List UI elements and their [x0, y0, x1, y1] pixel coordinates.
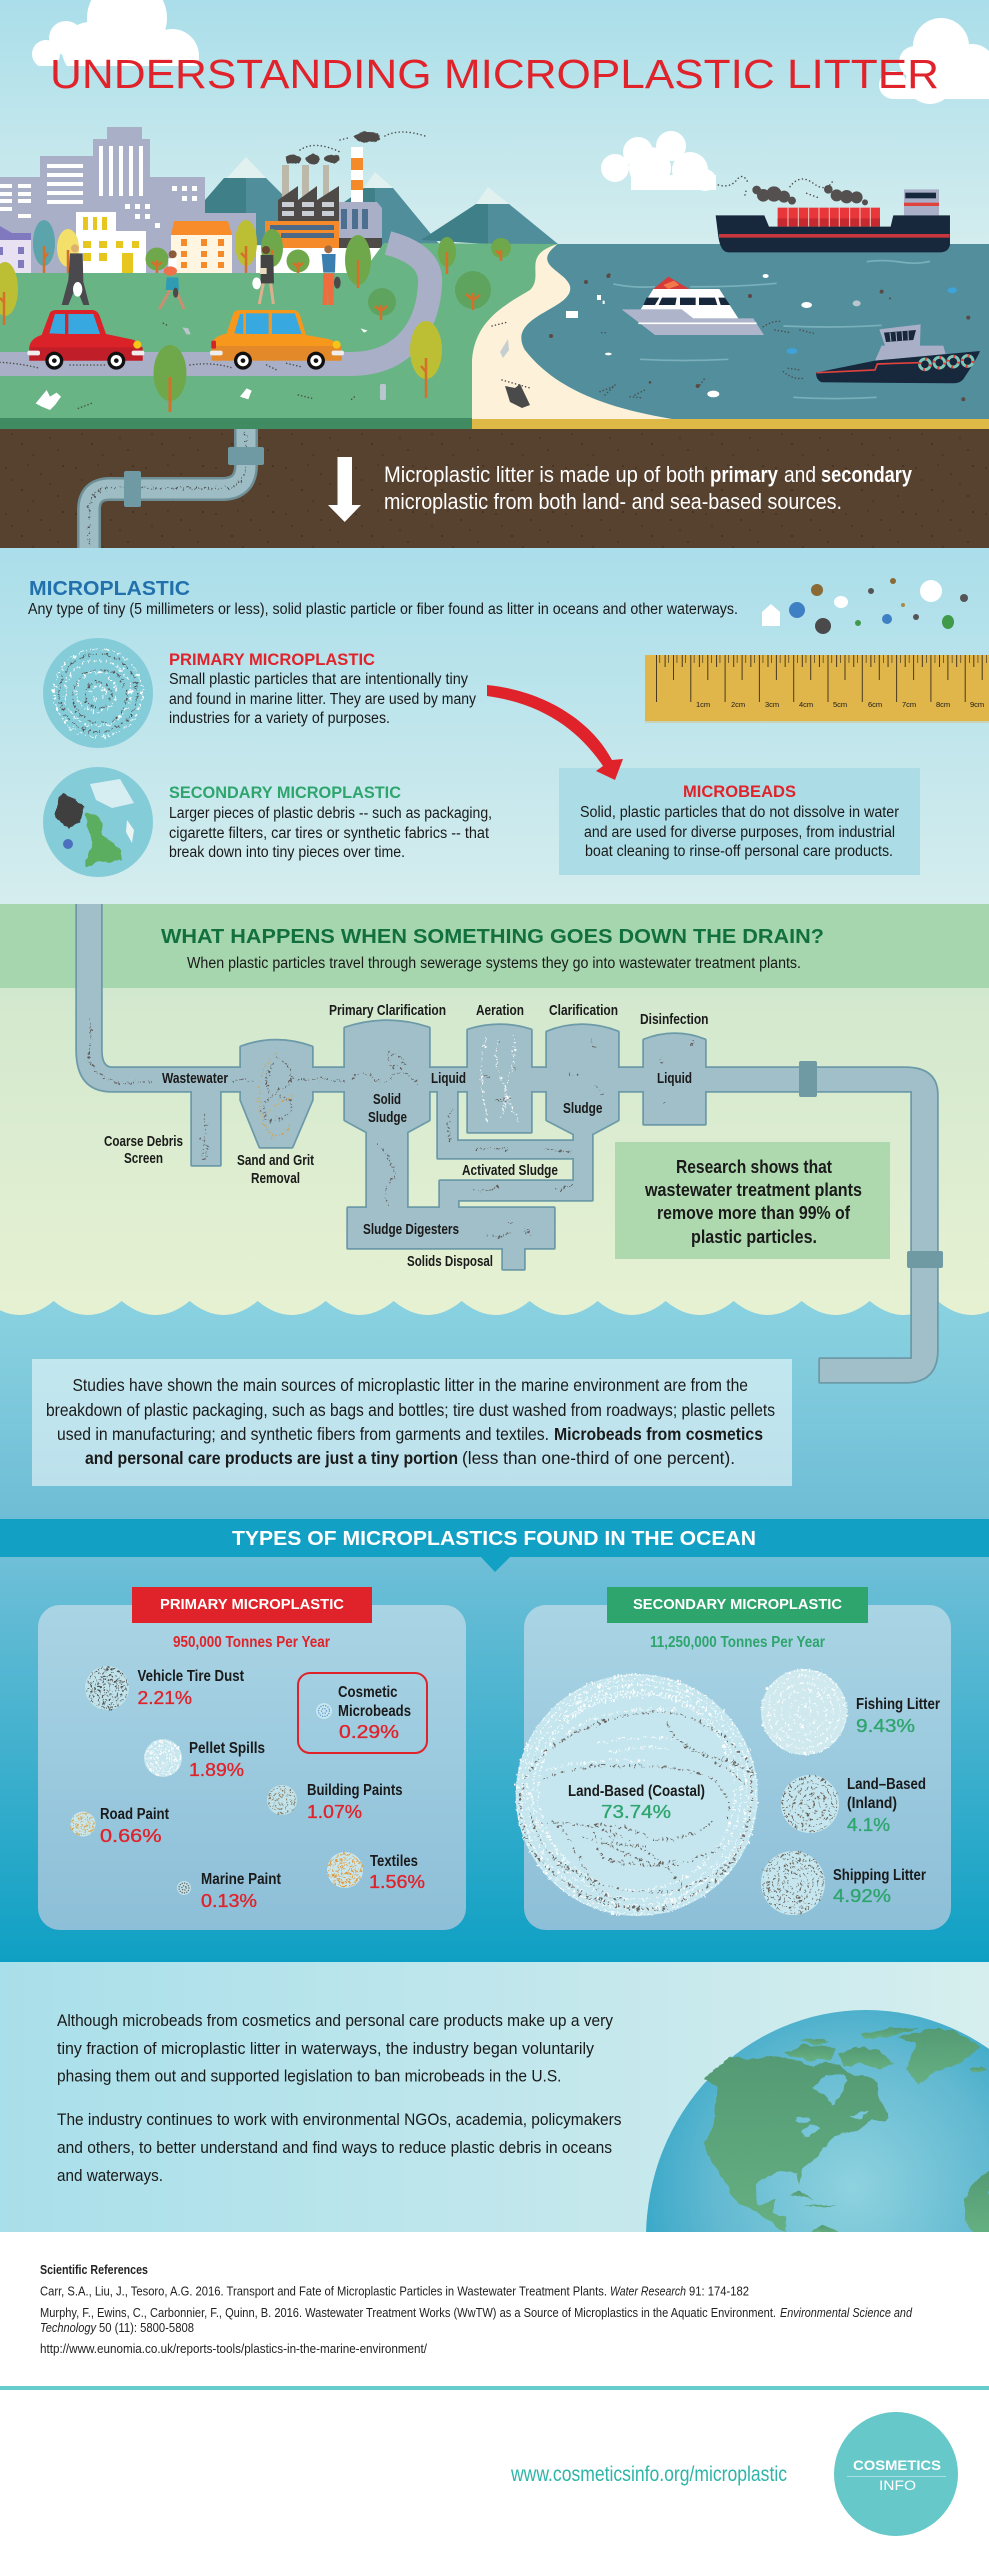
land-based inland: Land–Based: [847, 1776, 926, 1793]
road paint: Road Paint: [100, 1806, 170, 1823]
building paints: 1.07%: [307, 1802, 362, 1822]
scientific references: Scientific References: [40, 2263, 148, 2277]
diagram labels: Liquid: [431, 1070, 466, 1087]
cloud: top right: [879, 18, 989, 104]
cosmetic microbeads callout: Microbeads: [338, 1703, 411, 1720]
diagram labels: [104, 1002, 708, 1270]
scientific references: Murphy, F., Ewins, C., Carbonnier, F., Quinn, B. 2016. Wastewater Treatment Works (WwTW) as a Source of Microplastics in the Aquatic Environment.: [40, 2306, 776, 2320]
panel: microbeads: and are used for diverse purposes, from industrial: [584, 824, 895, 841]
primary microplastic text: PRIMARY MICROPLASTIC: [169, 650, 375, 669]
diagram labels: Clarification: [549, 1002, 618, 1019]
cloud: above the ship: [601, 131, 716, 191]
factory: [265, 147, 382, 248]
diagram labels: Sludge Digesters: [363, 1221, 459, 1238]
pipe couplings: [799, 1061, 943, 1268]
panel: microbeads: Solid, plastic particles that do not dissolve in water: [580, 804, 899, 821]
panel: studies: Microbeads from cosmetics: [554, 1424, 763, 1444]
ruler: 5cm: [833, 700, 847, 709]
grass: [0, 243, 562, 419]
title: UNDERSTANDING MICROPLASTIC LITTER: [50, 51, 939, 97]
heading: microplastic: MICROPLASTIC: [29, 578, 190, 600]
arrow down: [328, 457, 361, 522]
shipping litter: 4.92%: [833, 1886, 891, 1906]
road paint: [70, 1806, 170, 1846]
panel: primary microplastic: [38, 1587, 466, 1930]
secondary microplastic text: Larger pieces of plastic debris -- such as packaging,: [169, 805, 492, 822]
green heading band: When plastic particles travel through sewerage systems they go into wastewater treatment plants.: [187, 955, 801, 972]
intro text: secondary: [821, 462, 913, 487]
panel: microplastic definition background: [0, 548, 989, 904]
intro text: Microplastic litter is made up of both: [384, 462, 705, 487]
panel: secondary microplastic: [516, 1587, 951, 1930]
secondary microplastic text: break down into tiny pieces over time.: [169, 844, 405, 861]
secondary microplastic text: [169, 783, 492, 861]
secondary label: SECONDARY MICROPLASTIC: [633, 1596, 842, 1613]
red car: [27, 310, 144, 370]
road paint: 0.66%: [100, 1826, 162, 1846]
panel: studies: [32, 1359, 792, 1486]
diagram labels: Wastewater: [162, 1070, 228, 1087]
marine paint: [177, 1871, 282, 1911]
diagram labels: Screen: [124, 1150, 163, 1167]
pellet spills: [144, 1739, 265, 1780]
icon: primary microplastic circle: [43, 638, 153, 748]
vehicle tire dust: [85, 1666, 245, 1710]
scientific references: http://www.eunomia.co.uk/reports-tools/plastics-in-the-marine-environment/: [40, 2342, 427, 2356]
diagram labels: Coarse Debris: [104, 1133, 183, 1150]
banner: types of microplastics: TYPES OF MICROPLASTICS FOUND IN THE OCEAN: [232, 1528, 756, 1550]
beach litter: [492, 322, 530, 408]
panel: studies: (less than one-third of one percent).: [462, 1448, 735, 1468]
closing text: [57, 2011, 622, 2185]
ruler: [645, 655, 989, 723]
closing text: and waterways.: [57, 2166, 163, 2185]
ocean section background: [0, 1557, 989, 1962]
ruler: 6cm: [868, 700, 882, 709]
land-based inland: (Inland): [847, 1795, 897, 1812]
particles in the plant: [88, 1020, 693, 1237]
callout: research: plastic particles.: [691, 1226, 817, 1247]
shipping litter: [761, 1851, 926, 1915]
land-based coastal: [516, 1674, 758, 1916]
logo: cosmetics info: [834, 2412, 958, 2536]
closing text: phasing them out and supported legislation to ban microbeads in the U.S.: [57, 2066, 562, 2086]
beach side sea litter: [549, 273, 705, 395]
pellet spills: Pellet Spills: [189, 1740, 265, 1757]
textiles: 1.56%: [369, 1872, 425, 1892]
globe: [646, 2010, 989, 2232]
diagram labels: Sludge: [563, 1100, 602, 1117]
ruler: 8cm: [936, 700, 950, 709]
trees: [0, 220, 511, 412]
arrow: primary to microbeads: [487, 685, 623, 780]
city windows: [0, 146, 197, 228]
closing text: tiny fraction of microplastic litter in waterways, the industry began voluntarily: [57, 2039, 594, 2058]
primary label: [132, 1587, 372, 1623]
purple house: [0, 226, 31, 273]
cosmetic microbeads callout: 0.29%: [339, 1722, 399, 1742]
definition text: Any type of tiny (5 millimeters or less), solid plastic particle or fiber found as litter in oceans and other waterways.: [28, 601, 738, 618]
panel: studies: breakdown of plastic packaging, such as bags and bottles; tire dust washed from roadways; plastic pellets: [46, 1400, 775, 1420]
footer rule: [0, 2386, 989, 2390]
mountains: [205, 157, 558, 245]
primary microplastic text: and found in marine litter. They are used by many: [169, 691, 476, 708]
building paints: Building Paints: [307, 1782, 403, 1799]
ruler: 7cm: [902, 700, 916, 709]
vehicle tire dust: 2.21%: [138, 1688, 192, 1708]
diagram labels: Sand and Grit: [237, 1152, 314, 1169]
marine paint: Marine Paint: [201, 1871, 282, 1888]
diagram labels: Activated Sludge: [462, 1162, 558, 1179]
pipe underground: [89, 429, 264, 548]
fishing litter: 9.43%: [856, 1716, 915, 1736]
callout: research: Research shows that: [676, 1156, 832, 1177]
soil: [0, 429, 989, 548]
land-based inland: 4.1%: [847, 1815, 890, 1835]
orange car: [210, 310, 344, 370]
panel: studies: and personal care products are just a tiny portion: [85, 1448, 458, 1468]
scientific references: 50 (11): 5800-5808: [99, 2321, 194, 2335]
diagram labels: Solid: [373, 1091, 401, 1108]
textiles: [327, 1852, 425, 1892]
land litter: [0, 323, 386, 410]
ruler: 9cm: [970, 700, 984, 709]
closing text: The industry continues to work with environmental NGOs, academia, policymakers: [57, 2110, 622, 2129]
diagram labels: Removal: [251, 1170, 300, 1187]
marine paint: 0.13%: [201, 1891, 257, 1911]
panel: studies: used in manufacturing; and synthetic fibers from garments and textiles.: [57, 1424, 549, 1444]
logo: cosmetics info: COSMETICS: [853, 2458, 941, 2473]
intro text: microplastic from both land- and sea-based sources.: [384, 489, 842, 514]
land-based coastal: Land-Based (Coastal): [568, 1783, 705, 1800]
orange roof house: [171, 221, 232, 273]
primary tonnage: 950,000 Tonnes Per Year: [173, 1634, 330, 1651]
diagram labels: Liquid: [657, 1070, 692, 1087]
primary microplastic text: [169, 650, 476, 727]
building paints: [267, 1782, 403, 1822]
tugboat: [816, 324, 980, 383]
primary microplastic text: industries for a variety of purposes.: [169, 710, 390, 727]
yacht: [622, 277, 764, 335]
land-based coastal: 73.74%: [601, 1802, 671, 1822]
scientific references: [40, 2263, 913, 2356]
sky background: [0, 0, 989, 246]
primary label: PRIMARY MICROPLASTIC: [160, 1596, 344, 1613]
water with wave edge: [0, 1301, 989, 1519]
callout: research: wastewater treatment plants: [644, 1179, 862, 1200]
logo: cosmetics info: INFO: [879, 2478, 916, 2493]
vehicle tire dust: Vehicle Tire Dust: [138, 1668, 245, 1685]
diagram labels: Aeration: [476, 1002, 524, 1019]
secondary microplastic text: SECONDARY MICROPLASTIC: [169, 783, 401, 802]
intro text: primary: [710, 462, 779, 487]
pellet spills: 1.89%: [189, 1760, 244, 1780]
scientific references: Environmental Science and: [780, 2306, 913, 2320]
ruler: 3cm: [765, 700, 779, 709]
secondary label: [607, 1587, 868, 1623]
diagram labels: Disinfection: [640, 1011, 708, 1028]
panel: microbeads: [559, 768, 920, 875]
ruler: 2cm: [731, 700, 745, 709]
icon: plastic particles: [762, 578, 968, 634]
diagram labels: Sludge: [368, 1109, 407, 1126]
panel: closing statement background: [0, 1962, 989, 2232]
primary microplastic text: Small plastic particles that are intentionally tiny: [169, 671, 468, 688]
closing text: and others, to better understand and find ways to reduce plastic debris in oceans: [57, 2138, 612, 2157]
sea waves and litter: [600, 261, 970, 401]
textiles: Textiles: [370, 1853, 418, 1870]
ruler: 1cm: [696, 700, 710, 709]
fishing litter: Fishing Litter: [856, 1696, 940, 1713]
panel: microbeads: MICROBEADS: [683, 782, 796, 801]
white office building: [76, 212, 146, 273]
intro text: and: [784, 462, 816, 487]
factory smoke: [285, 132, 425, 164]
secondary tonnage: 11,250,000 Tonnes Per Year: [650, 1634, 825, 1651]
diagram labels: Primary Clarification: [329, 1002, 446, 1019]
fishing litter: [761, 1669, 940, 1755]
diagram labels: Solids Disposal: [407, 1253, 493, 1270]
banner: types of microplastics: [0, 1519, 989, 1572]
intro text: [384, 462, 913, 514]
scientific references: Carr, S.A., Liu, J., Tesoro, A.G. 2016. Transport and Fate of Microplastic Particles in Wastewater Treatment Plants.: [40, 2284, 607, 2298]
callout: research: remove more than 99% of: [657, 1202, 851, 1223]
icon: secondary microplastic circle: [43, 767, 153, 877]
secondary microplastic text: cigarette filters, car tires or synthetic fabrics -- that: [169, 825, 490, 842]
container ship: [716, 177, 950, 252]
illustration: city and land: [0, 127, 672, 419]
road: [0, 243, 430, 364]
cloud: top left: [32, 0, 199, 66]
treatment plant diagram: [70, 900, 943, 1382]
shipping litter: Shipping Litter: [833, 1867, 926, 1884]
green heading band: [0, 904, 989, 988]
scientific references: 91: 174-182: [689, 2284, 749, 2298]
land-based inland: [781, 1775, 926, 1835]
sea: [521, 244, 989, 419]
cosmetic microbeads callout: Cosmetic: [338, 1684, 398, 1701]
city skyline: [0, 127, 256, 275]
cosmetic microbeads callout: [298, 1673, 427, 1753]
green heading band: WHAT HAPPENS WHEN SOMETHING GOES DOWN THE DRAIN?: [161, 926, 824, 948]
ground strips: [0, 418, 989, 429]
website url: www.cosmeticsinfo.org/microplastic: [510, 2463, 787, 2486]
closing text: Although microbeads from cosmetics and personal care products make up a very: [57, 2011, 613, 2030]
panel: microbeads: boat cleaning to rinse-off personal care products.: [585, 843, 893, 860]
panel: drain background: [0, 988, 989, 1318]
ruler: 4cm: [799, 700, 813, 709]
beach: [472, 244, 672, 419]
scientific references: Water Research: [610, 2284, 686, 2298]
scientific references: Technology: [40, 2321, 97, 2335]
callout: research: [615, 1142, 890, 1259]
panel: studies: Studies have shown the main sources of microplastic litter in the marine environment are from the: [72, 1375, 748, 1395]
people: [62, 244, 341, 309]
